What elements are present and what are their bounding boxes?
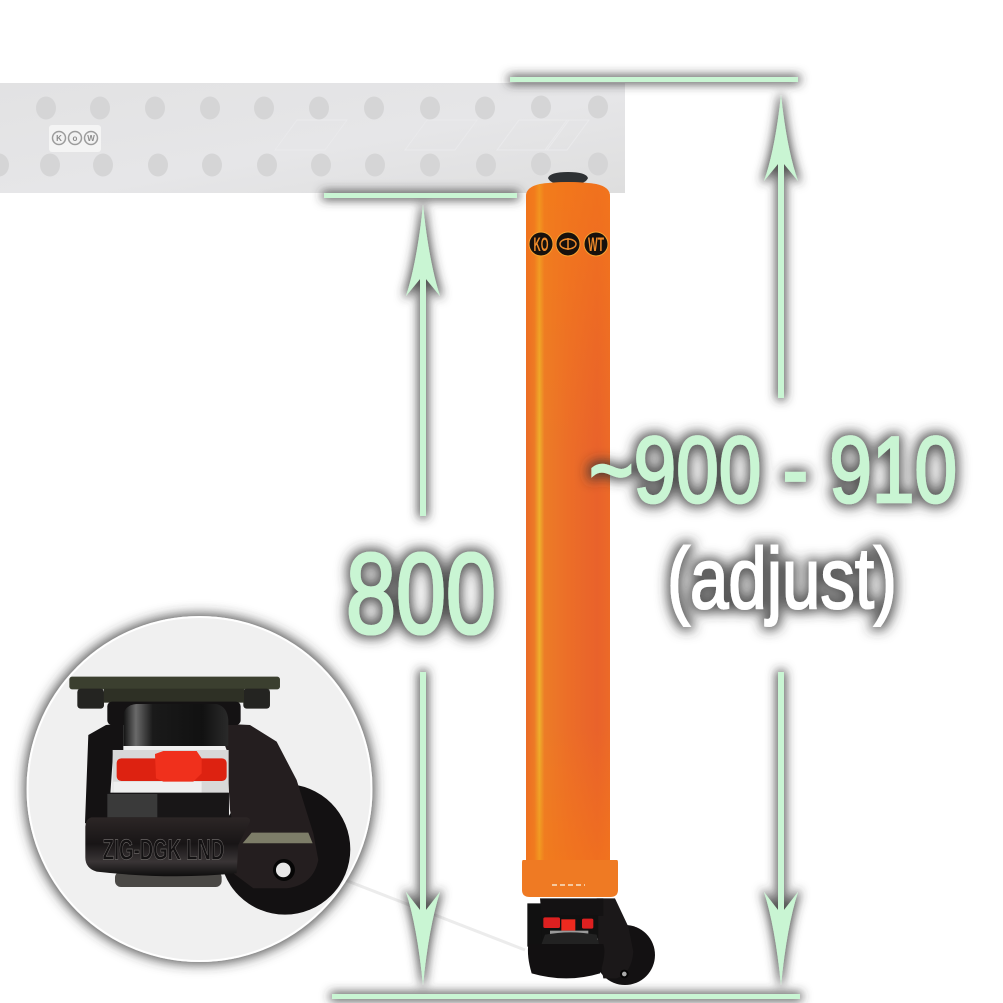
swing arm bbox=[217, 723, 318, 888]
label: (adjust): (adjust) bbox=[667, 531, 897, 627]
small caster lower bbox=[540, 932, 600, 948]
connector line to caster bbox=[345, 880, 525, 950]
small caster body bbox=[527, 903, 545, 947]
collar weld mark bbox=[552, 884, 585, 886]
floor line bbox=[332, 994, 800, 999]
table plate bbox=[0, 83, 625, 193]
red knob bbox=[117, 751, 227, 782]
white spacer bbox=[113, 782, 202, 793]
underside line bbox=[324, 193, 517, 198]
small caster red knob bbox=[542, 915, 598, 939]
plate logo tag: W bbox=[87, 134, 95, 143]
arrow: 800 upper bbox=[406, 205, 440, 516]
arrow: 900 lower bbox=[764, 672, 798, 985]
enlarged caster bbox=[69, 677, 350, 915]
left body bbox=[85, 723, 123, 823]
base ring bbox=[85, 817, 250, 876]
leg knob bbox=[548, 172, 588, 188]
arm stripe bbox=[243, 833, 313, 843]
embossed base lettering: ZIG-DGK LND bbox=[103, 834, 224, 866]
leg bottom collar bbox=[522, 860, 618, 897]
small caster bolt bbox=[620, 970, 629, 978]
lower block bbox=[107, 793, 229, 819]
callout circle bbox=[28, 617, 372, 961]
label: 800: 800 bbox=[346, 531, 496, 658]
small caster bbox=[527, 898, 655, 985]
arrow: 800 lower bbox=[406, 672, 440, 985]
orange leg tube bbox=[522, 182, 618, 897]
caster detail callout bbox=[28, 617, 372, 961]
top line overall bbox=[510, 77, 798, 82]
leg logo: WT bbox=[588, 235, 604, 256]
plate logo tag: K bbox=[56, 134, 62, 143]
neck bbox=[107, 702, 241, 725]
dimension lines and arrows bbox=[324, 77, 800, 999]
adjustment window bbox=[113, 750, 229, 793]
wheel bbox=[220, 784, 350, 915]
leg logo: KO bbox=[534, 235, 548, 256]
plate feet bbox=[77, 689, 270, 709]
plate holes bbox=[0, 96, 608, 176]
small caster hub bbox=[540, 898, 603, 916]
arrow: 900 upper bbox=[764, 95, 798, 398]
dome bbox=[123, 704, 228, 746]
small caster arm bbox=[597, 898, 633, 978]
top plate bbox=[69, 677, 280, 689]
small caster wheel bbox=[595, 925, 655, 985]
small caster base bbox=[528, 944, 604, 978]
leg logo bbox=[529, 232, 608, 256]
foot pad bbox=[115, 872, 222, 887]
plate logo tag bbox=[49, 125, 101, 152]
plate logo tag: o bbox=[73, 134, 78, 143]
embossed plate pattern bbox=[275, 120, 589, 150]
wheel bolt bbox=[273, 859, 295, 881]
